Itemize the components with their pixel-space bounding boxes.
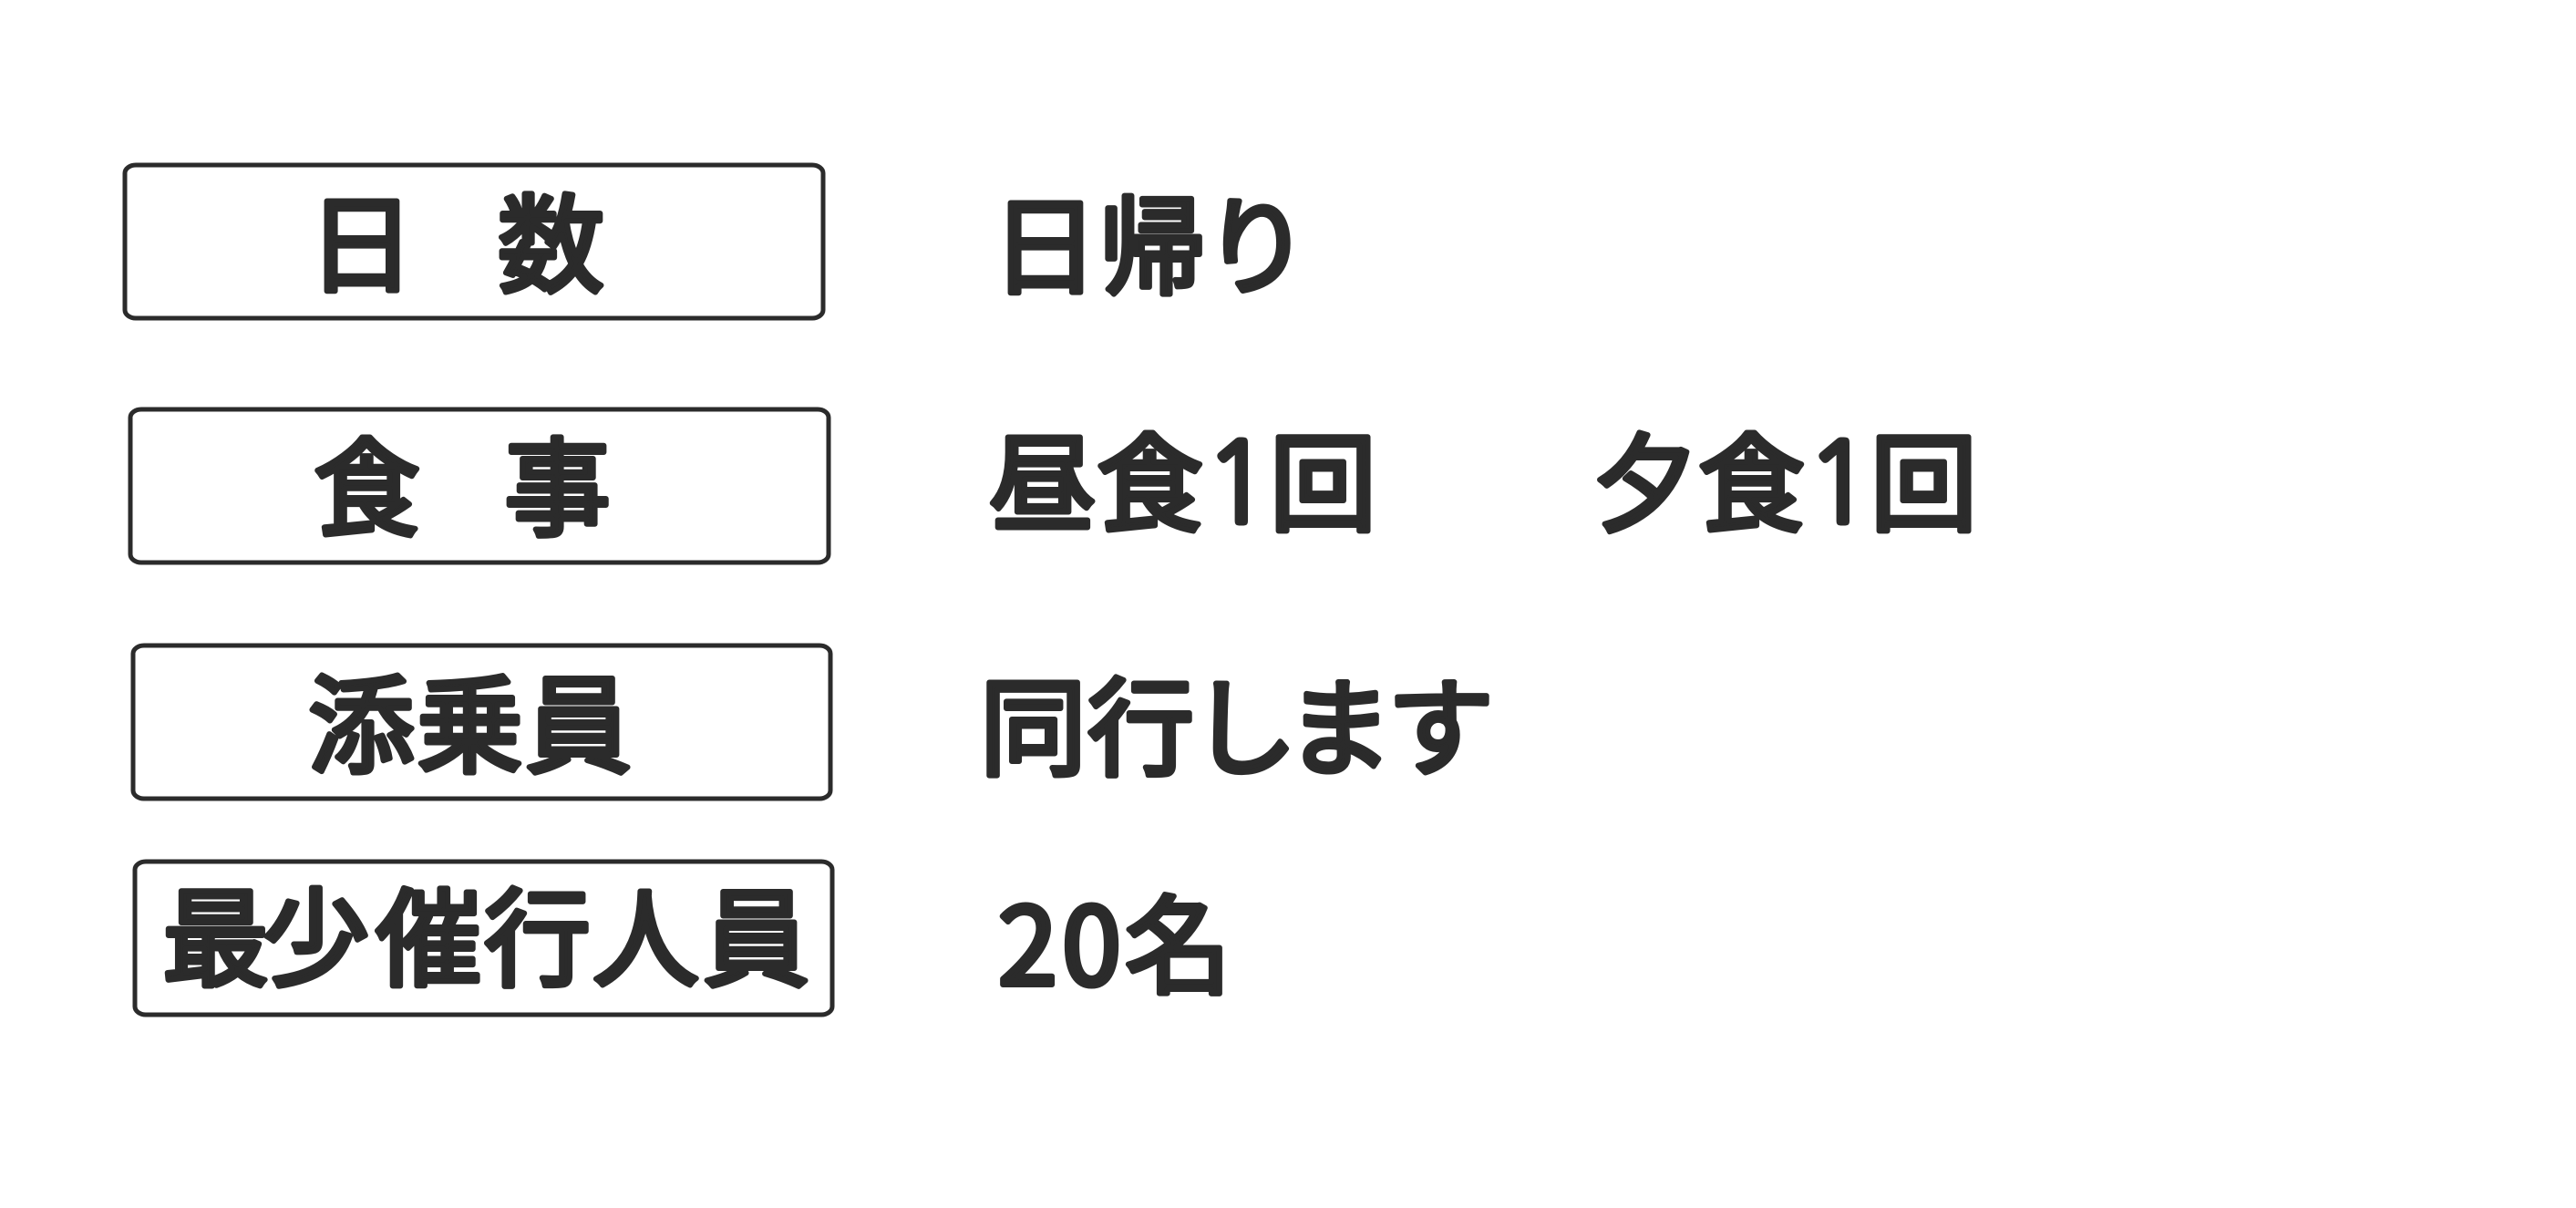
label box: tour conductor: 添乗員 (308, 640, 632, 795)
value: day trip: 日帰り (992, 161, 1310, 316)
row: tour conductor (133, 640, 1494, 799)
label box: days: 日数 (308, 160, 604, 315)
value: 20 people: 20名 (998, 861, 1231, 1016)
row: days (125, 160, 1310, 318)
value: one dinner: 夕食 (1592, 398, 1805, 553)
value: one lunch: 1 (1204, 428, 1272, 539)
value: one dinner: 回 (1870, 398, 1977, 553)
row: meals (130, 398, 1977, 563)
value: one lunch: 回 (1270, 398, 1376, 553)
label box: days (125, 160, 823, 318)
value: one dinner: 1 (1806, 428, 1873, 539)
row: minimum participants (135, 853, 1231, 1016)
label box: meals: 食事 (314, 403, 611, 558)
label box: tour conductor (133, 640, 830, 799)
value: one lunch: 昼食 (989, 398, 1203, 553)
label box: minimum participants: 最少催行人員 (162, 853, 809, 1008)
value: accompanied: 同行します (980, 643, 1494, 798)
label box: meals (130, 403, 829, 563)
